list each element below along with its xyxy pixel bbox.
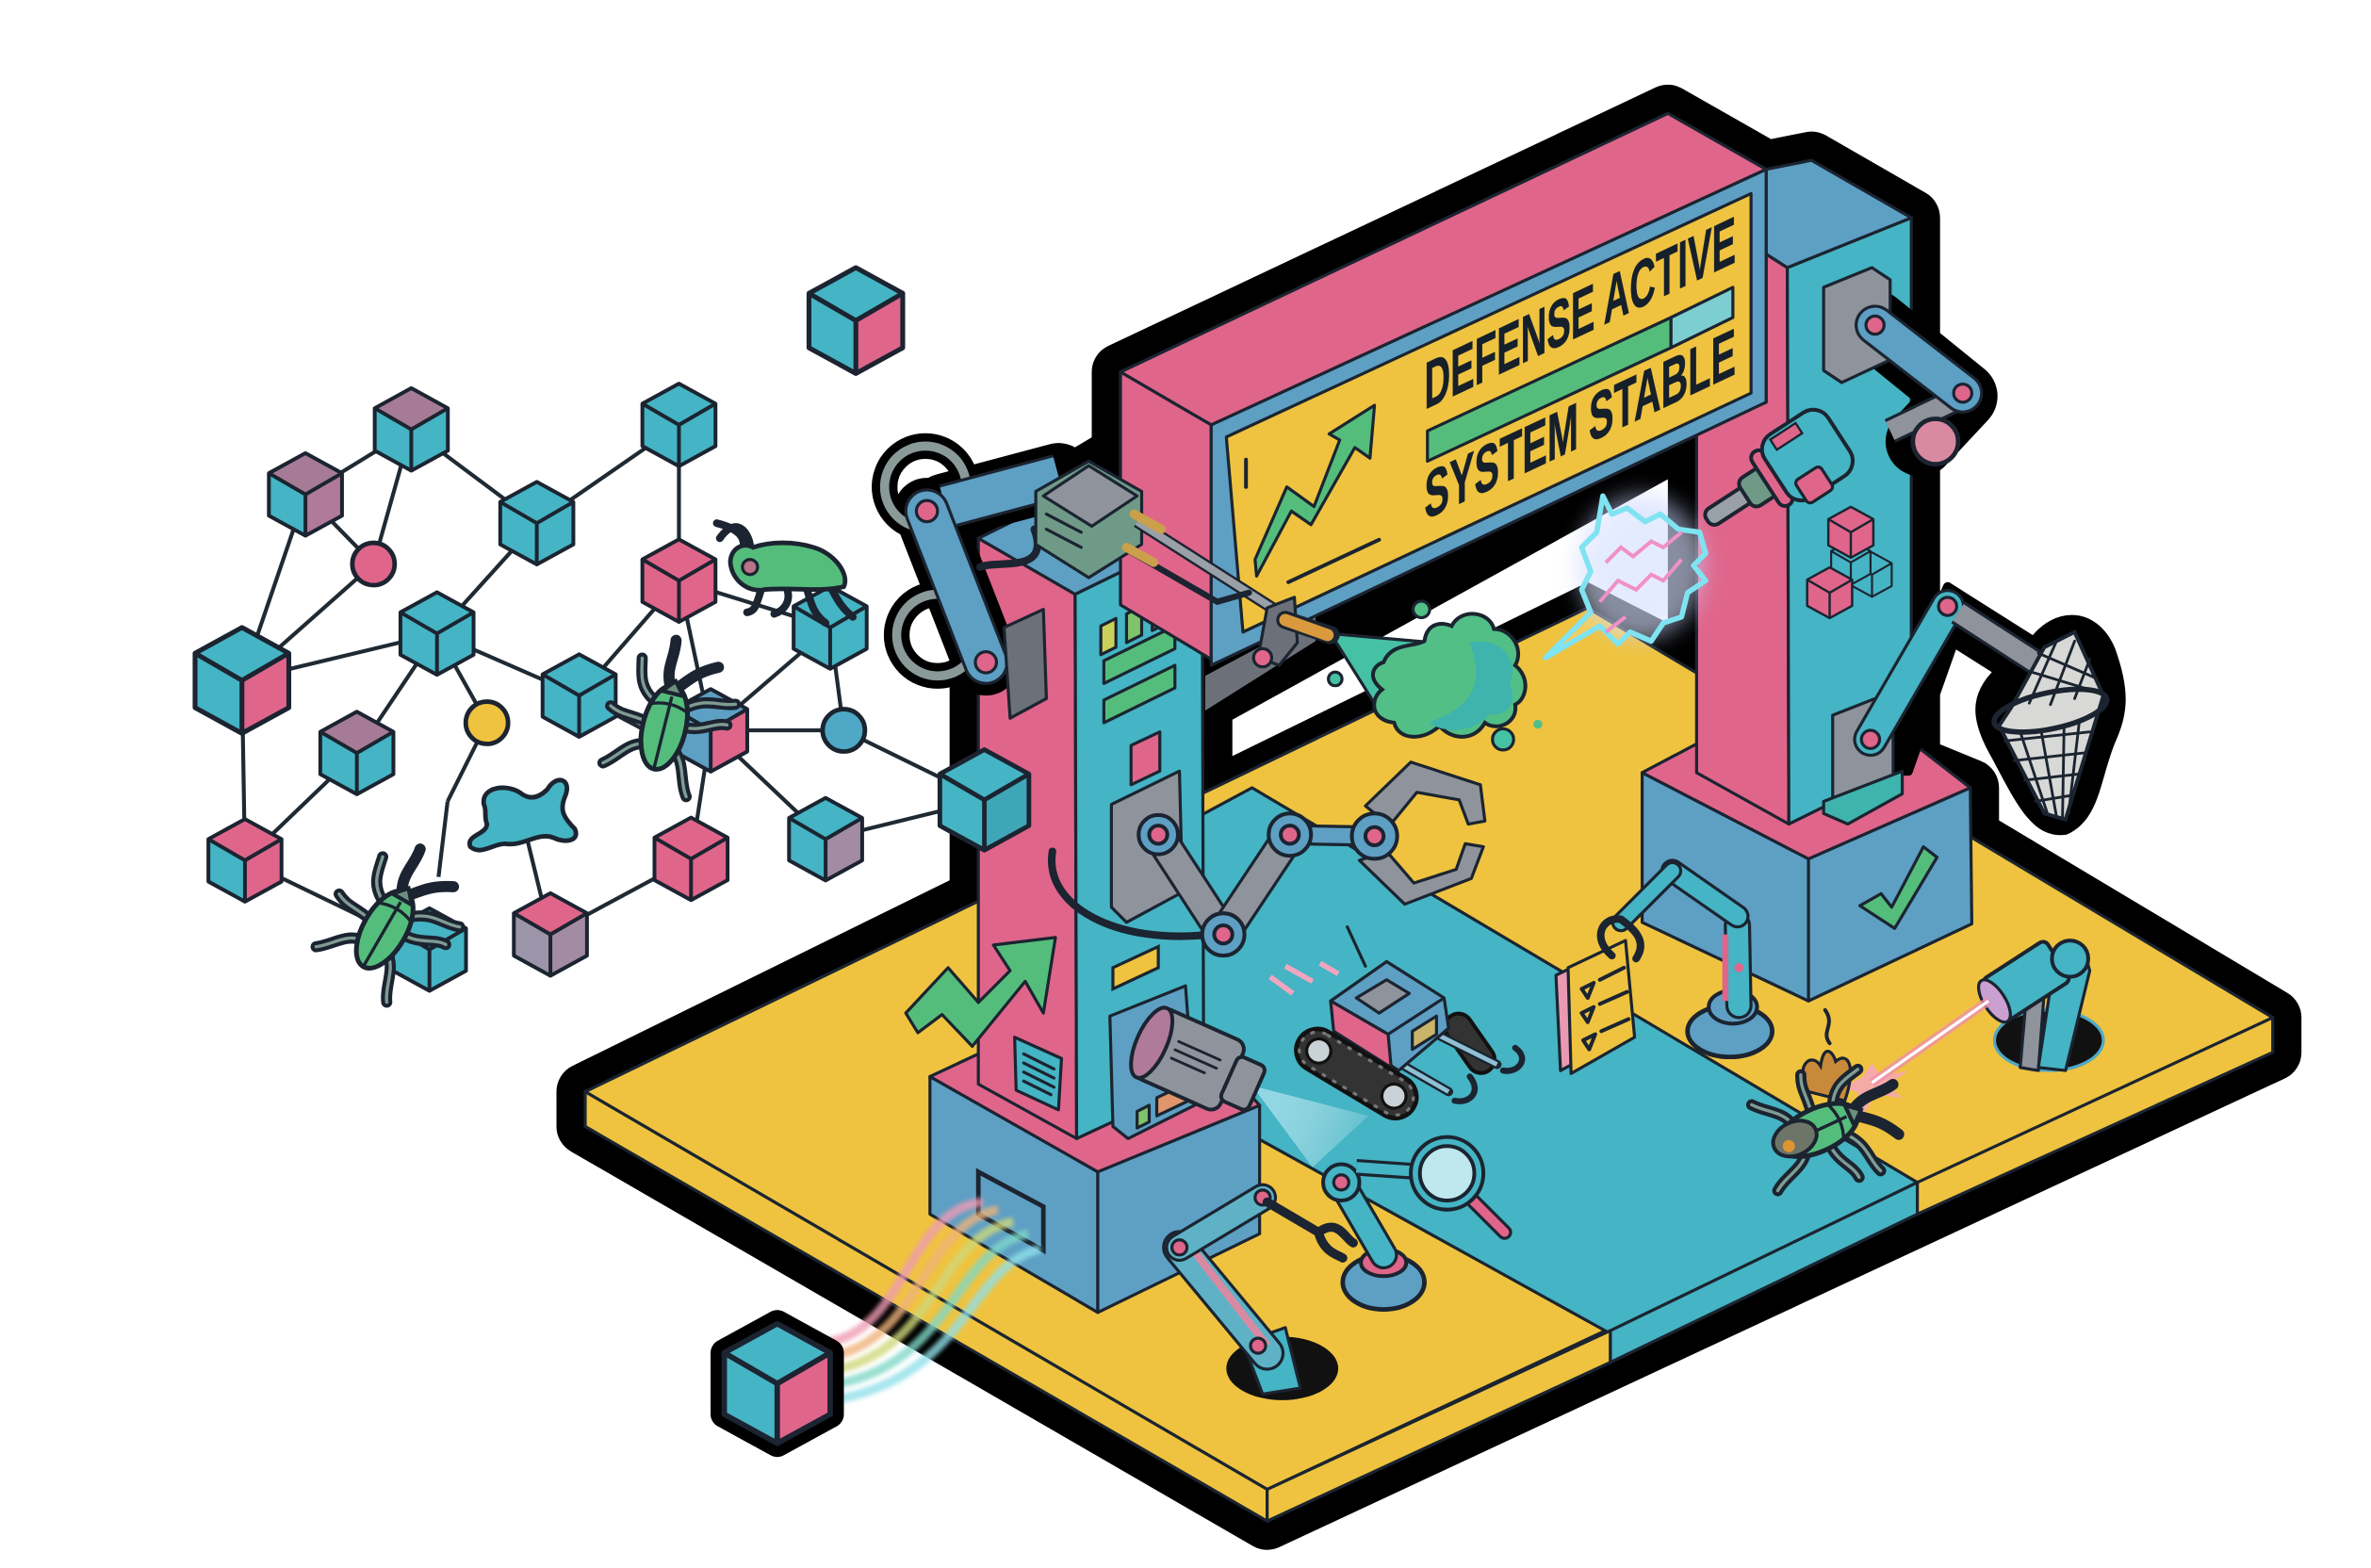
smoke curl [1825,1010,1830,1043]
bracket [1833,698,1893,816]
cube [320,711,393,794]
cloud puffs [1373,613,1526,737]
spray beam [1252,1086,1368,1168]
network cube on pillar [940,749,1029,850]
left base front [930,1076,1098,1313]
document icon [1015,1037,1061,1110]
cloud shade [1429,642,1513,730]
laser beam [1872,1001,1988,1083]
teal lane [1058,788,1918,1333]
robot vent [1356,980,1409,1013]
glow [1578,495,1704,640]
cube under beetle [393,908,466,991]
cable [1052,851,1210,937]
pink pillar face [1696,254,1789,825]
bracket foot [1823,771,1903,825]
burning beetle [1738,1010,1923,1214]
cube [269,453,342,536]
cannon mount [1110,986,1195,1138]
left base top [930,1043,1260,1172]
cube [208,819,282,902]
cube [793,586,867,669]
hole [1994,1010,2103,1070]
pink arcs [1600,532,1681,632]
clipboard [1568,940,1635,1073]
pink pillar face [978,538,1076,1138]
stacked small cubes [1807,507,1891,618]
cube [514,893,587,975]
beetle lower left [304,825,483,1015]
front track [1288,1021,1424,1126]
teal pillar face [1788,218,1911,825]
lower link [1158,835,1223,935]
grey extension [1958,612,2036,662]
left pillar [906,476,1260,1313]
claw upper [1365,762,1485,825]
mount lights [1137,1083,1188,1128]
magnifier handle [1470,1198,1505,1233]
cannon [1110,986,1368,1168]
arm black halo [927,476,1058,662]
node: yellow [466,702,508,743]
cannon barrel [1122,1002,1272,1124]
cube: large left [195,628,288,733]
slot on base [978,1172,1043,1250]
blue arm [916,500,996,673]
beam top [1120,113,1766,425]
ant bug on cube [717,523,853,623]
mount plate [1111,771,1183,923]
base [1343,1255,1425,1310]
pillar cap [1766,160,1911,268]
clipboard arm [1556,871,1773,1073]
cube: infected [643,539,715,622]
cube [643,384,715,466]
panel bars [1104,626,1175,785]
check mark [1860,847,1937,928]
arch beam [1120,113,1766,665]
left base side [1098,1105,1260,1313]
cube [375,388,448,471]
arch frame underside [1205,617,1316,710]
input cube [725,1202,1040,1444]
wrench claw [1267,1202,1353,1258]
forearm [1621,871,1673,923]
cube [401,593,474,675]
robot body [1331,962,1448,1070]
base bracket [1243,1328,1300,1394]
data streams [826,1202,1040,1398]
sign status: SYSTEM STABLE [1425,314,1736,534]
teal pillar face [1075,532,1203,1138]
support [2038,950,2090,1070]
node: pink [352,543,395,585]
sign chart axes [1246,460,1379,582]
lightning burst [1545,495,1706,658]
progress bar track [1671,287,1733,348]
network of cubes with infected nodes [195,268,986,1015]
robot pink side [1331,1001,1391,1068]
under link [1890,396,1963,431]
bracket [1823,268,1890,383]
rising arrow icon [906,938,1055,1046]
hole [1226,1336,1338,1400]
beetle on network [594,629,747,803]
middle gripper arm [1052,762,1485,956]
lower link [1323,1165,1383,1255]
blue upper link [945,476,1058,507]
upper link [1180,1198,1263,1248]
couplings [1126,514,1161,563]
platform side: left [585,1092,1267,1521]
clipboard back [1556,948,1611,1070]
robot top [1331,962,1444,1035]
platform [585,608,2273,1521]
joints [1172,1190,1270,1353]
spray head box [1036,461,1141,578]
laser head [1972,939,2071,1027]
progress bar fill [1428,318,1671,461]
right net arm [1823,587,2121,830]
motion lines [1270,963,1338,993]
charred beetle [1738,1041,1923,1214]
bracket [1004,610,1046,718]
magnifier arm [1323,1137,1505,1310]
cube [725,1324,830,1444]
cube [654,818,728,900]
sign chart arrow [1255,405,1375,576]
arm [1866,316,1971,402]
charred head [1767,1114,1823,1163]
cable [980,530,1038,567]
claw lower [1360,843,1483,905]
antenna [1348,927,1365,966]
arm link [1861,597,1956,748]
rear track [1440,1008,1500,1078]
spray cone [1331,633,1433,710]
vertical link [1725,925,1743,1005]
node: blue [823,710,865,752]
top link [1673,871,1738,916]
cube [789,798,862,880]
ember [1783,1140,1795,1152]
black silhouette of platform [585,608,2273,1521]
black halo [1875,325,1963,442]
wrenches [1398,1035,1522,1102]
cube [543,654,615,737]
nozzle clamp [1253,597,1331,667]
black silhouette of arch [930,113,1970,1313]
upper link [1223,835,1290,935]
cube [500,482,573,564]
right upper arm with drill [1687,268,1971,556]
droplets [1329,601,1543,750]
net arm black backing [1868,587,2121,830]
joint [2052,940,2088,977]
sign heading: DEFENSE ACTIVE [1425,202,1736,424]
tracked robot [1270,927,1522,1126]
right base side [1808,788,1971,1001]
cube: floating top [809,268,903,373]
arm joints [1138,813,1398,956]
lower link [1180,1248,1267,1353]
equipment stripe [1113,946,1158,988]
wrist link [1290,835,1375,836]
flames [1803,1052,1851,1101]
connecting link [1356,1168,1421,1172]
net mesh [1990,632,2110,820]
network links [242,425,986,950]
platform side: right [1267,1331,1611,1521]
beam left face [1120,372,1211,660]
spray tube [1131,522,1279,612]
pulley rings [885,446,978,676]
laser arm [1841,939,2103,1116]
robot screen [1413,1016,1436,1050]
right base block [1643,773,1808,1001]
platform side: teal [1611,1183,1918,1363]
top-left robotic sprayer [885,446,1331,718]
platform side: right yellow [1918,1018,2273,1215]
status lights [1101,595,1168,655]
grey support [2020,990,2044,1070]
pulley [1913,418,1958,465]
floor arm in hole [1172,1190,1353,1400]
corrupted blob [469,780,576,850]
sign frame [1211,170,1766,665]
cube under beetle [674,689,747,772]
sign panel [1226,193,1751,632]
right base top [1643,741,1970,858]
pillar cap [978,476,1202,595]
base collar [1709,990,1758,1023]
bolt outline [1545,496,1706,658]
magnifier lens [1411,1137,1483,1210]
gripper [1601,919,1641,958]
right pillar [1643,160,1971,1001]
drill [1687,402,1862,556]
laser impact spark [1841,1063,1908,1116]
platform top: yellow [585,608,2273,1490]
base [1688,1005,1773,1057]
green spray cloud [1329,601,1543,750]
pink collar [1361,1249,1406,1276]
arch opening [1233,480,1668,756]
